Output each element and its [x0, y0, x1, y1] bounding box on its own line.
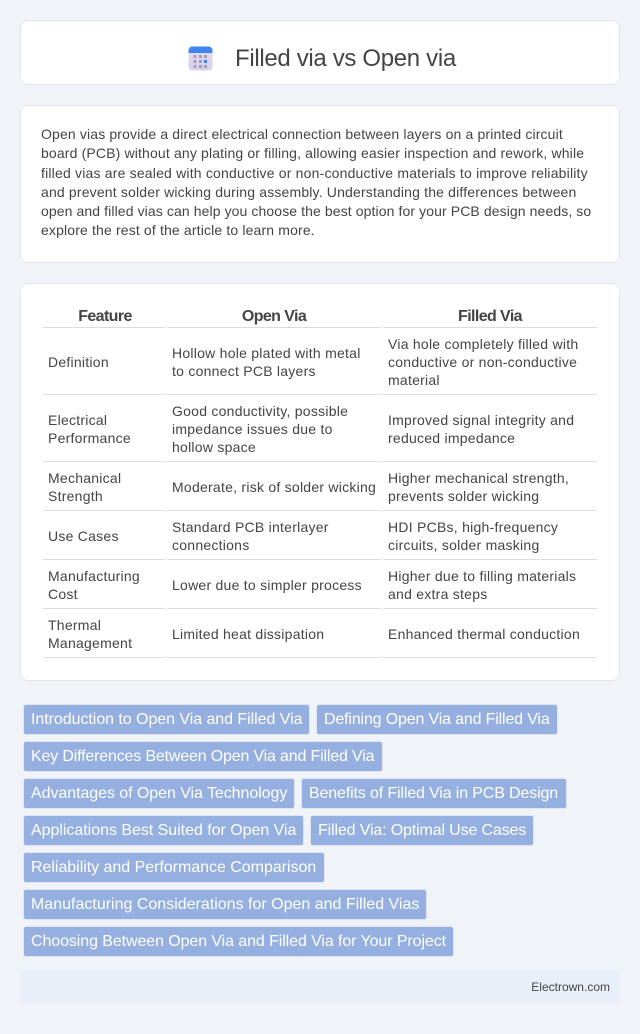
row: electrical performance: Good conductivity, possible: [172, 403, 348, 419]
chip: reliability: Reliability and Performance Comparison: [31, 859, 316, 876]
chip: applications: [23, 815, 304, 846]
chip: advantages: Advantages of Open Via Technology: [31, 785, 287, 802]
chip: choosing: Choosing Between Open Via and Filled Via for Your Project: [31, 933, 446, 950]
comparison table panel: [20, 283, 620, 681]
intro text: open and filled vias can help you choose the best option for your PCB design needs, so: [41, 203, 591, 219]
chip: manufacturing: [23, 889, 427, 920]
topic links: [23, 704, 567, 957]
row: manufacturing cost: [43, 568, 597, 609]
chip: optimal use cases: [310, 815, 534, 846]
row: use cases: HDI PCBs, high-frequency: [388, 519, 558, 535]
row: electrical performance: impedance issues due to: [172, 421, 333, 437]
table column headers: [43, 308, 597, 328]
row: definition: Definition: [48, 354, 109, 370]
chip: introduction: Introduction to Open Via and Filled Via: [31, 711, 302, 728]
row: thermal management: Enhanced thermal conduction: [388, 626, 580, 642]
title: Filled via vs Open via: [235, 45, 456, 72]
row: electrical performance: [43, 403, 597, 462]
row: manufacturing cost: Cost: [48, 586, 78, 602]
row: electrical performance: Performance: [48, 430, 131, 446]
table column headers: Open Via: [242, 308, 306, 325]
intro text: explore the rest of the article to learn more.: [41, 222, 315, 238]
chip: defining: Defining Open Via and Filled Via: [324, 711, 550, 728]
row: definition: material: [388, 372, 440, 388]
row: mechanical strength: Mechanical: [48, 470, 121, 486]
row: mechanical strength: Moderate, risk of solder wicking: [172, 479, 376, 495]
row: definition: Via hole completely filled with: [388, 336, 578, 352]
row: use cases: Use Cases: [48, 528, 119, 544]
row: mechanical strength: Strength: [48, 488, 103, 504]
footer text: Electrown.com: [531, 980, 610, 994]
row: thermal management: [43, 617, 597, 658]
row: manufacturing cost: and extra steps: [388, 586, 487, 602]
row: mechanical strength: prevents solder wicking: [388, 488, 539, 504]
intro text: and prevent solder wicking during assembly. Understanding the differences between: [41, 184, 576, 200]
chip: reliability: [23, 852, 325, 883]
chip: defining: [316, 704, 558, 735]
row: use cases: connections: [172, 537, 249, 553]
row: thermal management: Thermal: [48, 617, 101, 633]
chip: manufacturing: Manufacturing Considerations for Open and Filled Vias: [31, 896, 419, 913]
intro text: [41, 126, 591, 238]
footer bar: [20, 970, 620, 1004]
row: definition: conductive or non-conductive: [388, 354, 577, 370]
intro text: board (PCB) without any plating or filling, allowing easier inspection and rework, while: [41, 145, 584, 161]
table column headers: Filled Via: [458, 308, 522, 325]
chip: advantages: [23, 778, 295, 809]
row: manufacturing cost: Manufacturing: [48, 568, 140, 584]
chip: key differences: Key Differences Between Open Via and Filled Via: [31, 748, 374, 765]
row: manufacturing cost: Lower due to simpler process: [172, 577, 362, 593]
intro text: filled vias are sealed with conductive or non-conductive materials to improve reliability: [41, 165, 588, 181]
row: thermal management: Limited heat dissipation: [172, 626, 324, 642]
intro text panel: [20, 105, 620, 263]
chip: key differences: [23, 741, 383, 772]
chip: benefits: Benefits of Filled Via in PCB Design: [309, 785, 558, 802]
row: definition: [43, 336, 597, 395]
chip: choosing: [23, 926, 454, 957]
chip: benefits: [301, 778, 567, 809]
row: use cases: Standard PCB interlayer: [172, 519, 329, 535]
chip: applications: Applications Best Suited for Open Via: [31, 822, 296, 839]
icon: calendar: [188, 46, 212, 70]
table column headers: Feature: [78, 308, 132, 325]
row: mechanical strength: [43, 470, 597, 511]
row: definition: to connect PCB layers: [172, 363, 316, 379]
chip: optimal use cases: Filled Via: Optimal Use Cases: [318, 822, 526, 839]
row: electrical performance: hollow space: [172, 439, 256, 455]
row: use cases: circuits, solder masking: [388, 537, 540, 553]
header card: [20, 20, 620, 85]
row: mechanical strength: Higher mechanical strength,: [388, 470, 569, 486]
row: definition: Hollow hole plated with metal: [172, 345, 361, 361]
row: manufacturing cost: Higher due to filling materials: [388, 568, 576, 584]
row: use cases: [43, 519, 597, 560]
chip: introduction: [23, 704, 310, 735]
intro text: Open vias provide a direct electrical connection between layers on a printed circuit: [41, 126, 563, 142]
row: electrical performance: Improved signal integrity and: [388, 412, 574, 428]
row: electrical performance: Electrical: [48, 412, 107, 428]
row: electrical performance: reduced impedance: [388, 430, 515, 446]
row: thermal management: Management: [48, 635, 132, 651]
